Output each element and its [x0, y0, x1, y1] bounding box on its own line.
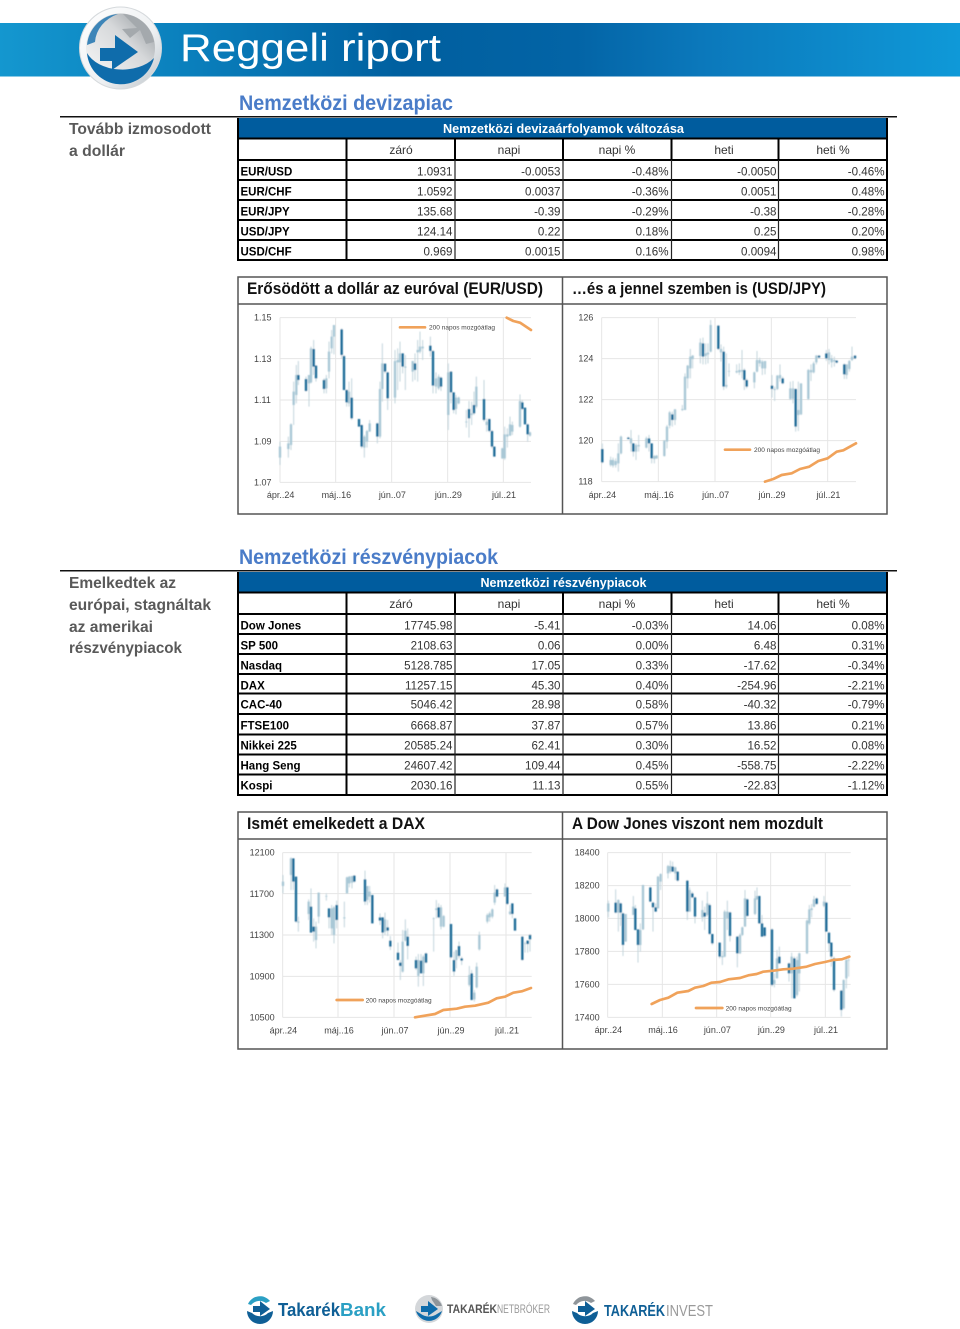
legend: 200 napos mozgóátlag	[726, 1005, 792, 1012]
row: Hang Seng	[240, 760, 884, 772]
row: USD/CHF: 0.16%	[636, 246, 668, 258]
row: EUR/CHF: 0.48%	[852, 186, 884, 198]
y axis labels: 17400	[575, 1012, 600, 1022]
y axis labels: 120	[578, 436, 593, 446]
row: DAX: 0.40%	[636, 680, 668, 692]
row: DAX: -2.21%	[848, 680, 884, 692]
row: SP 500: 0.31%	[852, 640, 884, 652]
legend	[337, 997, 432, 1004]
row: USD/JPY: 0.20%	[852, 226, 884, 238]
y axis labels: 11300	[250, 930, 274, 940]
row: Nasdaq: 17.05	[531, 660, 560, 672]
x axis labels	[589, 490, 840, 500]
section rule	[60, 570, 897, 572]
footer logo: TakarékNetbróker: NETBRÓKER	[497, 1303, 550, 1316]
row: USD/JPY: 0.22	[538, 226, 560, 238]
x axis labels: máj..16	[324, 1026, 354, 1036]
row: EUR/JPY	[240, 206, 884, 218]
sidebar note: dollar: Tovább izmosodott	[69, 121, 212, 138]
legend: 200 napos mozgóátlag	[366, 997, 432, 1004]
y axis labels: 1.09	[254, 436, 272, 446]
column headers: napi	[498, 597, 520, 611]
row: Dow Jones	[240, 620, 884, 632]
row: EUR/JPY: 135.68	[417, 206, 452, 218]
row: FTSE100: FTSE100	[240, 720, 289, 732]
legend	[725, 447, 820, 454]
footer logo: TakarékBank: Takarék	[278, 1300, 341, 1320]
row: USD/CHF	[240, 246, 884, 258]
row: Hang Seng: -558.75	[737, 760, 776, 772]
column headers: heti	[714, 597, 734, 611]
row: Nikkei 225: Nikkei 225	[240, 740, 297, 752]
row: FTSE100: 6668.87	[411, 720, 452, 732]
row: EUR/USD: -0.0050	[737, 166, 776, 178]
row: EUR/JPY: -0.28%	[848, 206, 884, 218]
row: CAC-40: 0.58%	[636, 698, 668, 712]
row: EUR/USD	[240, 166, 884, 178]
moving average line	[765, 443, 856, 482]
legend	[696, 1005, 792, 1012]
row: EUR/CHF	[240, 186, 884, 198]
y axis labels: 1.15	[254, 313, 272, 323]
footer logo: TakarékNetbróker	[415, 1295, 550, 1323]
row: Nasdaq: -17.62	[744, 660, 776, 672]
x axis labels	[595, 1025, 838, 1035]
chart title: Dow Jones: A Dow Jones viszont nem mozdult	[572, 815, 823, 833]
row: EUR/USD: EUR/USD	[240, 166, 292, 178]
moving average line	[652, 957, 849, 1004]
column headers	[389, 143, 850, 157]
row: Nasdaq: -0.34%	[848, 660, 884, 672]
x axis labels: ápr..24	[267, 490, 294, 500]
x axis labels: jún..29	[434, 490, 462, 500]
row: Nikkei 225: 0.30%	[636, 740, 668, 752]
y axis labels: 124	[578, 354, 593, 364]
y axis labels: 18400	[575, 848, 600, 858]
column headers: záró	[389, 143, 413, 157]
y axis labels	[254, 313, 272, 487]
legend	[400, 325, 495, 332]
row: Nasdaq	[240, 660, 884, 672]
y axis labels	[578, 313, 593, 487]
row: USD/CHF: USD/CHF	[240, 246, 292, 258]
footer logo: TakarékBank	[247, 1296, 387, 1324]
row: Dow Jones: -0.03%	[632, 620, 668, 632]
row: SP 500: 6.48	[754, 640, 776, 652]
chart title: DAX: Ismét emelkedett a DAX	[247, 815, 425, 833]
row: Kospi: 2030.16	[411, 780, 452, 792]
moving average line	[507, 318, 531, 330]
footer logo: TakarékInvest	[572, 1296, 713, 1324]
table title: Nemzetközi devizaárfolyamok változása	[443, 122, 685, 136]
column headers: napi %	[599, 143, 636, 157]
row: EUR/USD: 1.0931	[417, 166, 452, 178]
column headers: záró	[389, 597, 413, 611]
x axis labels: jún..07	[701, 490, 729, 500]
row: DAX: 11257.15	[405, 680, 452, 692]
candlestick chart: Dow Jones	[575, 848, 851, 1035]
row: Dow Jones: -5.41	[534, 620, 560, 632]
row: Nasdaq: 5128.785	[404, 660, 452, 672]
sidebar note: dollar: a dollár	[69, 143, 125, 160]
candles	[608, 861, 849, 1017]
row: CAC-40: 5046.42	[411, 698, 452, 712]
x axis labels: jún..29	[757, 1025, 785, 1035]
column headers	[389, 597, 850, 611]
candlestick chart: DAX	[250, 848, 532, 1036]
legend: 200 napos mozgóátlag	[429, 325, 495, 332]
section heading: equities: Nemzetközi részvénypiacok	[239, 546, 498, 569]
row: USD/JPY: USD/JPY	[240, 226, 290, 238]
x axis labels: máj..16	[322, 490, 351, 500]
row: Nasdaq: Nasdaq	[240, 660, 282, 672]
row: USD/CHF: 0.0015	[525, 246, 560, 258]
row: Hang Seng: 0.45%	[636, 760, 668, 772]
y axis labels: 11700	[250, 889, 274, 899]
row: USD/JPY: 0.18%	[636, 226, 668, 238]
row: SP 500: 2108.63	[411, 640, 452, 652]
sidebar note: equities: az amerikai	[69, 619, 153, 636]
column headers: heti %	[816, 143, 850, 157]
column headers: napi %	[599, 597, 636, 611]
y axis labels	[575, 848, 600, 1022]
sidebar note: equities: részvénypiacok	[69, 640, 182, 657]
row: Hang Seng: 24607.42	[404, 760, 452, 772]
row: Kospi	[240, 780, 884, 792]
row: Kospi: 11.13	[532, 780, 560, 792]
row: DAX: DAX	[240, 680, 265, 692]
x axis labels: ápr..24	[270, 1026, 297, 1036]
y axis labels: 12100	[250, 848, 275, 858]
sidebar note: equities: európai, stagnáltak	[69, 597, 211, 614]
row: CAC-40: 28.98	[531, 698, 560, 712]
row: Kospi: Kospi	[240, 780, 272, 792]
row: EUR/CHF: -0.36%	[632, 186, 668, 198]
row: Dow Jones: 14.06	[747, 620, 776, 632]
row: Nikkei 225: 0.08%	[852, 740, 884, 752]
y axis labels: 17600	[575, 979, 600, 989]
x axis labels: júl..21	[494, 1026, 519, 1036]
y axis labels: 122	[578, 395, 593, 405]
footer logo: TakarékInvest: TAKARÉK	[604, 1301, 665, 1320]
report title: Reggeli riport	[180, 27, 441, 70]
row: Nasdaq: 0.33%	[636, 660, 668, 672]
row: USD/CHF: 0.969	[423, 246, 452, 258]
row: USD/JPY: 124.14	[417, 226, 453, 238]
row: Dow Jones: 0.08%	[852, 620, 884, 632]
section heading: foreign exchange: Nemzetközi devizapiac	[239, 92, 453, 115]
table title: Nemzetközi részvénypiacok	[480, 576, 647, 590]
column headers: heti	[714, 143, 734, 157]
row: FTSE100: 0.57%	[636, 720, 668, 732]
icon: main logo	[80, 7, 162, 89]
row: CAC-40: CAC-40	[240, 700, 282, 712]
row: Kospi: -1.12%	[848, 780, 884, 792]
x axis labels: máj..16	[648, 1025, 678, 1035]
row: EUR/USD: -0.0053	[521, 166, 560, 178]
row: FTSE100: 13.86	[747, 720, 776, 732]
row: SP 500: 0.00%	[636, 640, 668, 652]
y axis labels: 18000	[575, 913, 600, 923]
row: FTSE100	[240, 720, 884, 732]
row: CAC-40: -0.79%	[848, 698, 884, 712]
y axis labels: 1.13	[254, 354, 272, 364]
row: CAC-40: -40.32	[744, 698, 776, 712]
candles	[602, 320, 855, 472]
sidebar note: equities	[69, 575, 211, 657]
y axis labels: 118	[578, 477, 593, 487]
table: equity indices	[238, 572, 887, 796]
row: EUR/CHF: 0.0037	[525, 186, 560, 198]
row: Dow Jones: 17745.98	[404, 620, 452, 632]
row: EUR/USD: -0.46%	[848, 166, 884, 178]
row: CAC-40	[240, 698, 884, 712]
y axis labels: 1.11	[254, 395, 271, 405]
row: DAX: -254.96	[737, 680, 776, 692]
panel: FX charts	[238, 277, 887, 514]
x axis labels: jún..29	[436, 1026, 465, 1036]
row: SP 500: SP 500	[240, 640, 278, 652]
x axis labels: ápr..24	[595, 1025, 622, 1035]
row: EUR/CHF: 0.0051	[741, 186, 776, 198]
x axis labels: jún..29	[757, 490, 786, 500]
section rule	[60, 116, 897, 118]
row: EUR/JPY: -0.29%	[632, 206, 668, 218]
x axis labels: jún..07	[703, 1025, 731, 1035]
row: EUR/JPY: -0.38	[750, 206, 776, 218]
chart title: EUR/USD: Erősödött a dollár az euróval (EUR/USD)	[247, 280, 543, 298]
row: Nikkei 225	[240, 740, 884, 752]
y axis labels: 17800	[575, 946, 600, 956]
row: EUR/CHF: EUR/CHF	[240, 186, 292, 198]
footer logo: TakarékBank: Bank	[340, 1300, 387, 1320]
column headers: heti %	[816, 597, 850, 611]
x axis labels: jún..07	[380, 1026, 409, 1036]
row: Kospi: 0.55%	[636, 780, 668, 792]
panel: equity charts	[238, 812, 887, 1049]
y axis labels: 10500	[250, 1012, 275, 1022]
row: Nikkei 225: 16.52	[747, 740, 776, 752]
moving average line	[415, 988, 531, 1017]
row: USD/JPY	[240, 226, 884, 238]
chart title: USD/JPY: …és a jennel szemben is (USD/JPY)	[572, 280, 826, 298]
y axis labels: 10900	[250, 971, 275, 981]
candlestick chart: EUR/USD	[254, 313, 532, 500]
row: EUR/USD: -0.48%	[632, 166, 668, 178]
header band	[0, 23, 960, 76]
row: Hang Seng: 109.44	[525, 760, 561, 772]
x axis labels	[270, 1026, 519, 1036]
sidebar note: dollar	[69, 121, 212, 160]
row: SP 500	[240, 640, 884, 652]
sidebar note: equities: Emelkedtek az	[69, 575, 176, 592]
row: FTSE100: 0.21%	[852, 720, 884, 732]
row: USD/CHF: 0.98%	[852, 246, 884, 258]
footer logo: TakarékInvest: INVEST	[666, 1303, 713, 1320]
row: Kospi: -22.83	[744, 780, 776, 792]
footer logo: TakarékNetbróker: TAKARÉK	[447, 1303, 498, 1316]
candlestick chart: USD/JPY	[578, 313, 858, 500]
row: FTSE100: 37.87	[531, 720, 560, 732]
column headers: napi	[498, 143, 520, 157]
x axis labels: júl..21	[491, 490, 516, 500]
row: Dow Jones: Dow Jones	[240, 620, 301, 632]
candles	[280, 325, 530, 465]
row: Nikkei 225: 20585.24	[404, 740, 453, 752]
y axis labels	[250, 848, 275, 1022]
table: FX rates	[238, 118, 887, 261]
row: Hang Seng: -2.22%	[848, 760, 884, 772]
row: USD/JPY: 0.25	[754, 226, 776, 238]
y axis labels: 1.07	[254, 477, 272, 487]
row: USD/CHF: 0.0094	[741, 246, 777, 258]
x axis labels: jún..07	[378, 490, 406, 500]
legend: 200 napos mozgóátlag	[754, 447, 820, 454]
row: Nikkei 225: 62.41	[531, 740, 560, 752]
row: DAX: 45.30	[531, 680, 560, 692]
row: EUR/JPY: -0.39	[534, 206, 560, 218]
x axis labels: ápr..24	[589, 490, 616, 500]
y axis labels: 18200	[575, 881, 600, 891]
x axis labels	[267, 490, 516, 500]
x axis labels: júl..21	[815, 490, 840, 500]
row: EUR/JPY: EUR/JPY	[240, 206, 290, 218]
row: EUR/CHF: 1.0592	[417, 186, 452, 198]
y axis labels: 126	[578, 313, 593, 323]
x axis labels: máj..16	[644, 490, 674, 500]
x axis labels: júl..21	[813, 1025, 838, 1035]
candles	[283, 857, 530, 1002]
row: Hang Seng: Hang Seng	[240, 760, 301, 772]
row: SP 500: 0.06	[538, 640, 560, 652]
row: DAX	[240, 680, 884, 692]
